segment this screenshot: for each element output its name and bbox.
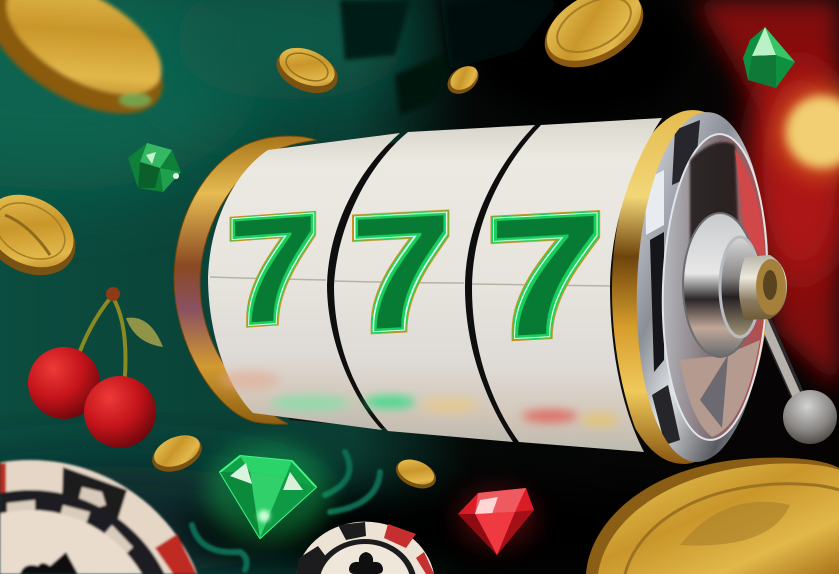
chrome reflections <box>645 120 700 445</box>
reel backing <box>226 118 660 451</box>
glow: bokeh light top right <box>776 86 839 178</box>
inner disc reflections <box>690 142 738 250</box>
chip suit mark <box>78 487 106 510</box>
chip black segment <box>62 467 127 522</box>
lever ball <box>783 390 837 444</box>
chip red segments <box>155 534 197 574</box>
chip centre <box>0 510 142 574</box>
inner disc <box>658 132 772 442</box>
poker chip: bottom centre <box>296 522 434 574</box>
coin: tiny top <box>442 60 484 100</box>
left gold ring <box>174 136 316 424</box>
reel 1 <box>208 133 400 430</box>
diamond: green bottom <box>206 442 330 542</box>
chrome disc <box>631 110 773 464</box>
cherry: right <box>84 376 156 448</box>
reel 3 <box>472 118 662 452</box>
hub inner ring <box>720 237 760 337</box>
reel horizontal seam <box>210 277 610 286</box>
chip club <box>20 552 78 574</box>
cherries <box>28 287 163 448</box>
hub cap end <box>756 259 786 315</box>
right gold ring <box>601 107 775 467</box>
coin: small top <box>270 40 344 102</box>
coin: lower left small <box>147 429 207 479</box>
diamond: red bottom <box>457 488 537 555</box>
cherry leaf <box>126 318 163 347</box>
gem: green top right <box>743 27 795 88</box>
chip inner band <box>0 490 165 574</box>
lever arm <box>765 322 805 412</box>
cherry stems <box>75 296 126 388</box>
coin: left <box>0 180 89 291</box>
reel 2 <box>334 125 535 442</box>
iridescent reflections <box>220 371 618 427</box>
cherry: left <box>28 347 100 419</box>
digit: third seven: 7 <box>487 178 604 375</box>
digit: first seven: 7 <box>227 181 319 357</box>
hub flange <box>683 213 757 357</box>
swirl: green smoke around diamond <box>192 452 380 570</box>
coin: bottom right large <box>586 458 839 574</box>
hub cap <box>739 255 787 320</box>
poker chip: bottom left <box>0 460 198 574</box>
gem: green top left <box>128 143 181 192</box>
chip dashes <box>7 500 35 514</box>
cherry stem knot <box>106 287 120 301</box>
coin: lower centre small <box>392 454 440 494</box>
slot machine drum <box>174 107 787 467</box>
digit: second seven: 7 <box>349 180 453 366</box>
coin: top left blurred <box>0 0 183 140</box>
lever <box>764 322 837 444</box>
coin: top centre right <box>532 0 656 83</box>
